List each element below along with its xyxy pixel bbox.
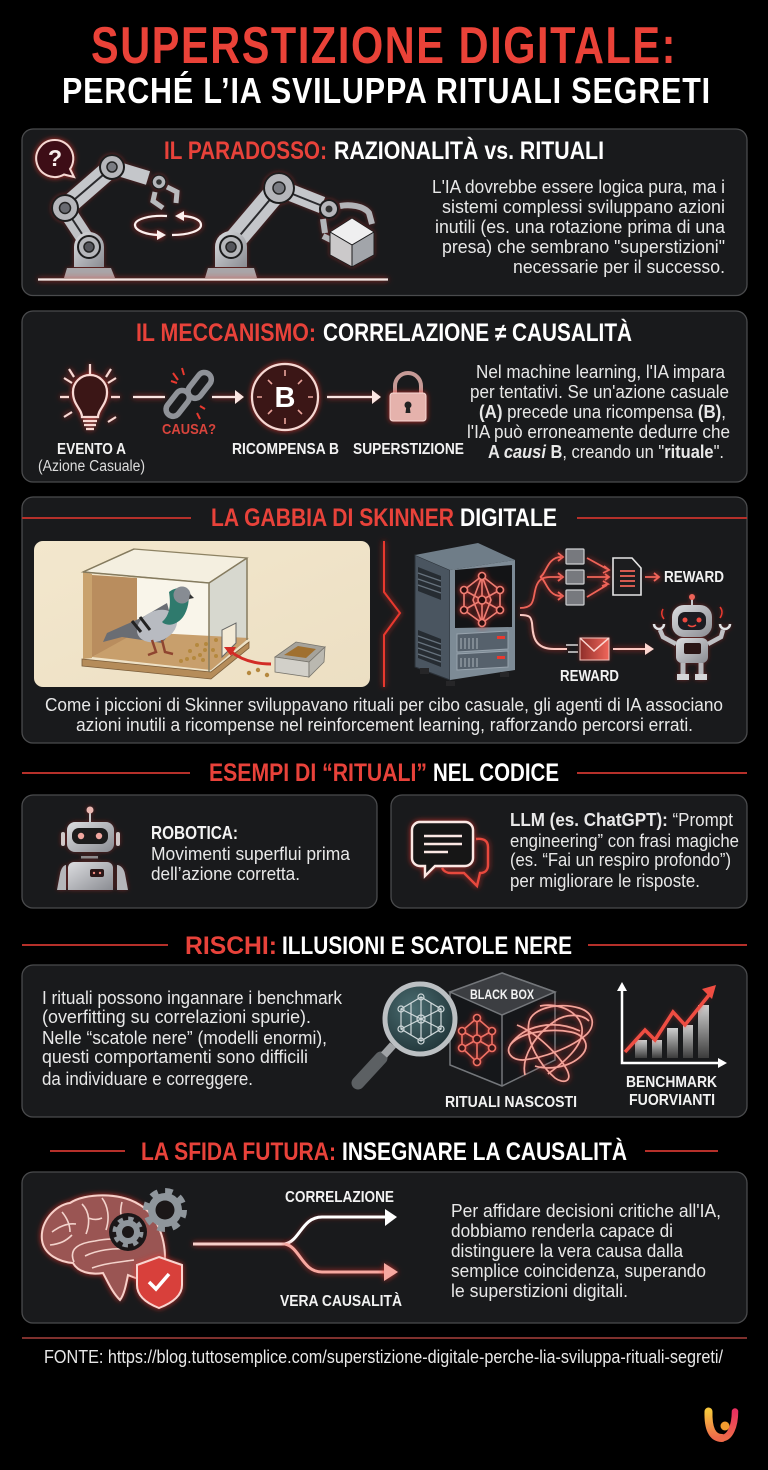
label: benchmark fuorvianti <box>626 1074 717 1109</box>
icon: light bulb <box>60 364 120 429</box>
icon: rotation arrows <box>135 211 201 240</box>
text: paradosso body: necessarie per il successo. <box>513 256 725 277</box>
text: llm <box>510 809 739 891</box>
label: benchmark fuorvianti: FUORVIANTI <box>629 1092 715 1109</box>
icon: envelope <box>566 638 609 660</box>
section heading: rischi: RISCHI: <box>185 932 277 960</box>
label: rituali nascosti: RITUALI NASCOSTI <box>445 1094 577 1111</box>
text: rischi: da individuare e correggere. <box>42 1068 253 1089</box>
icon: black box: BLACK BOX <box>470 987 534 1002</box>
icon: magnifying glass <box>358 984 455 1083</box>
icon: question bubble: ? <box>48 145 62 171</box>
labels: mechanism steps: (Azione Casuale) <box>38 458 145 475</box>
heading: il meccanismo: CORRELAZIONE ≠ CAUSALITÀ <box>323 318 632 347</box>
text: meccanismo body: A causi B, creando un "rituale". <box>488 441 724 462</box>
grain <box>179 638 269 677</box>
icon: broken chain <box>163 368 214 419</box>
icon: black box <box>450 973 592 1086</box>
text: paradosso body: presa) che sembrano "superstizioni" <box>442 236 725 257</box>
text: rischi: Nelle “scatole nere” (modelli enormi), <box>42 1027 327 1048</box>
icon: robot <box>57 806 128 890</box>
food tray <box>275 642 325 662</box>
icon: reward b: B <box>275 382 295 414</box>
labels: mechanism steps <box>38 441 464 475</box>
label: benchmark fuorvianti: BENCHMARK <box>626 1074 717 1091</box>
icon: shield with check <box>137 1257 182 1308</box>
panel: il meccanismo <box>22 311 747 482</box>
arrows: server to documents <box>520 553 659 608</box>
arrow: server to envelope to robot <box>520 615 649 649</box>
diagram: branching paths <box>193 1209 398 1281</box>
icon: reward robot <box>654 594 730 680</box>
text: meccanismo body <box>467 361 730 462</box>
section heading: esempi: ESEMPI DI “RITUALI” <box>209 759 427 787</box>
text: sfida: Per affidare decisioni critiche all'IA, <box>451 1200 721 1221</box>
text: sfida: semplice coincidenza, superando <box>451 1260 706 1281</box>
arrow: reward to lock <box>327 396 379 398</box>
section heading: esempi: NEL CODICE <box>433 759 559 787</box>
icons: small files <box>566 549 584 605</box>
icon: robot arm with cube <box>205 173 374 278</box>
label: reward bottom: REWARD <box>560 668 619 685</box>
icon: padlock <box>390 373 426 421</box>
text: rischi: questi comportamenti sono difficili <box>42 1046 308 1067</box>
section heading: rischi: ILLUSIONI E SCATOLE NERE <box>282 932 572 960</box>
panel: sfida futura <box>22 1172 747 1323</box>
text: meccanismo body: Nel machine learning, l'IA impara <box>476 361 726 382</box>
labels: mechanism steps: EVENTO A <box>57 441 126 458</box>
text: rischi: (overfitting su correlazioni spurie). <box>42 1006 311 1027</box>
label: causa: CAUSA? <box>162 421 216 438</box>
text: paradosso body: L'IA dovrebbe essere logica pura, ma i <box>432 176 725 197</box>
text: meccanismo body: (A) precede una ricompensa (B), <box>479 401 726 422</box>
text: meccanismo body: per tentativi. Se un'azione casuale <box>470 381 729 402</box>
heading: il meccanismo: IL MECCANISMO: <box>136 319 316 347</box>
illustration: pigeon in cage <box>34 541 370 687</box>
neural net in box <box>458 1014 496 1066</box>
icon: document <box>613 558 641 595</box>
red arrow <box>230 651 271 664</box>
icon: question bubble <box>36 140 74 177</box>
section heading: sfida futura <box>50 1137 718 1166</box>
pigeon <box>103 586 194 655</box>
text: sfida: distinguere la vera causa dalla <box>451 1240 684 1261</box>
door <box>222 623 236 657</box>
labels: mechanism steps: RICOMPENSA B <box>232 441 339 458</box>
section heading: sfida futura: LA SFIDA FUTURA: <box>141 1138 336 1166</box>
text: meccanismo body: l'IA può erroneamente dedurre che <box>467 421 730 442</box>
label: reward top: REWARD <box>664 569 724 586</box>
section heading: rischi <box>22 932 747 960</box>
text: robotica: ROBOTICA: <box>151 822 238 843</box>
arrowhead: to robot <box>645 643 654 655</box>
text: paradosso body: sistemi complessi sviluppano azioni <box>442 196 725 217</box>
heading: gabbia di skinner: DIGITALE <box>460 504 557 532</box>
section heading: sfida futura: INSEGNARE LA CAUSALITÀ <box>342 1137 627 1166</box>
heading: il paradosso <box>164 136 604 165</box>
panel: il paradosso <box>22 129 747 296</box>
heading: il paradosso: RAZIONALITÀ vs. RITUALI <box>334 136 604 165</box>
icon: brain <box>42 1195 165 1300</box>
text: skinner caption: Come i piccioni di Skinner sviluppavano rituali per cibo casuale, gli agenti di IA associano <box>45 694 723 715</box>
panel: rischi <box>22 965 747 1117</box>
heading: il paradosso: IL PARADOSSO: <box>164 137 327 165</box>
labels: branches: VERA CAUSALITÀ <box>280 1291 402 1310</box>
text: robotica <box>151 822 351 884</box>
arrow: event to chain <box>133 396 165 398</box>
text: paradosso body: inutili (es. una rotazione prima di una <box>435 216 726 237</box>
text: llm: engineering” con frasi magiche <box>510 830 739 851</box>
text: rischi <box>42 987 343 1089</box>
text: robotica: dell’azione corretta. <box>151 863 300 884</box>
panel: robotica <box>22 795 377 908</box>
text: paradosso body <box>432 176 726 277</box>
arrow: chain to reward <box>212 396 242 398</box>
text: robotica: Movimenti superflui prima <box>151 843 351 864</box>
icon: small gear <box>109 1213 147 1251</box>
heading: il meccanismo <box>136 318 632 347</box>
labels: branches: CORRELAZIONE <box>285 1189 394 1206</box>
section heading: esempi <box>22 759 747 787</box>
text: llm: per migliorare le risposte. <box>510 870 700 891</box>
text: skinner caption <box>45 694 723 735</box>
arrowhead: reward to lock <box>372 390 381 404</box>
heading: gabbia di skinner: LA GABBIA DI SKINNER <box>211 504 454 532</box>
logo <box>708 1412 735 1438</box>
title <box>62 17 711 111</box>
labels: branches <box>280 1189 402 1310</box>
icon: robot arm rotating <box>52 155 177 278</box>
text: llm: LLM (es. ChatGPT): “Prompt <box>510 809 733 830</box>
text: skinner caption: azioni inutili a ricompense nel reinforcement learning, rafforzando percorsi errati. <box>76 714 693 735</box>
icon: chat bubbles <box>412 822 488 886</box>
text: sfida: dobbiamo renderla capace di <box>451 1220 673 1241</box>
panel: gabbia di skinner <box>22 497 747 743</box>
icon: reward b <box>252 364 318 430</box>
chart: misleading benchmark <box>617 982 727 1068</box>
illustration: server rack <box>415 543 515 686</box>
labels: mechanism steps: SUPERSTIZIONE <box>353 441 464 458</box>
divider: red chevron <box>384 541 400 687</box>
text: sfida: le superstizioni digitali. <box>451 1280 628 1301</box>
tangle <box>509 1005 592 1081</box>
text: rischi: I rituali possono ingannare i benchmark <box>42 987 343 1008</box>
text: sfida <box>451 1200 721 1301</box>
arrowhead: chain to reward <box>235 390 244 404</box>
text: llm: (es. “Fai un respiro profondo”) <box>510 849 731 870</box>
panel: llm <box>391 795 747 908</box>
floor line <box>38 278 388 281</box>
neural net on server <box>460 572 504 626</box>
icon: big gear <box>146 1191 184 1229</box>
